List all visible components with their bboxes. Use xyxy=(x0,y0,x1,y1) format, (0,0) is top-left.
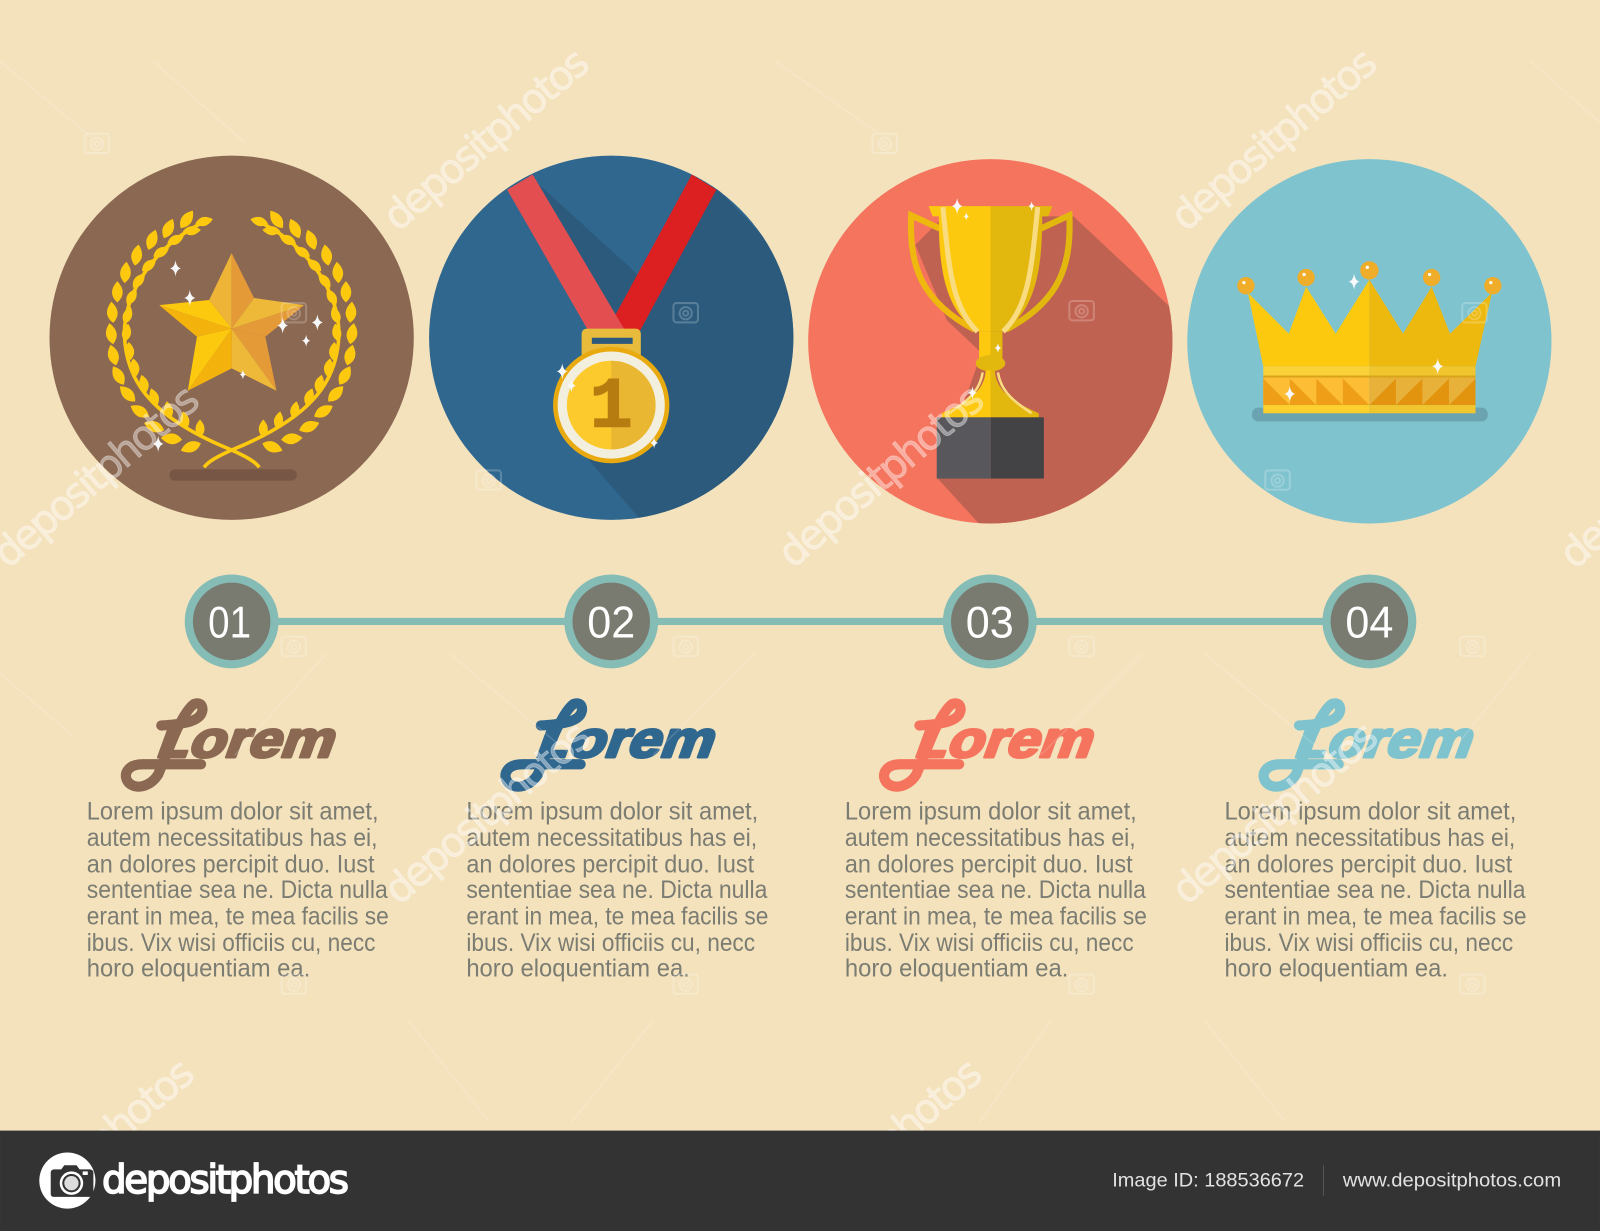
step number 01: 01 xyxy=(208,597,251,648)
text block: horo eloquentiam ea. xyxy=(466,955,690,983)
text block: ibus. Vix wisi officiis cu, necc xyxy=(87,929,376,957)
icon: gold trophy xyxy=(808,159,1189,531)
text block: erant in mea, te mea facilis se xyxy=(1224,902,1527,930)
text block: autem necessitatibus has ei, xyxy=(87,824,378,852)
text block: sententiae sea ne. Dicta nulla xyxy=(1224,876,1526,904)
text block: horo eloquentiam ea. xyxy=(1224,955,1448,983)
panel: step 3 trophy xyxy=(808,159,1189,983)
text block: sententiae sea ne. Dicta nulla xyxy=(845,876,1146,904)
heading: Lorem: L xyxy=(530,712,582,769)
watermark overlay: depositphotos xyxy=(768,375,993,577)
text block xyxy=(1224,797,1527,983)
text block: autem necessitatibus has ei, xyxy=(845,824,1136,852)
text block xyxy=(845,797,1147,983)
heading: Lorem xyxy=(884,703,1105,787)
heading: Lorem: orem xyxy=(183,712,347,769)
heading: Lorem: L xyxy=(151,712,203,769)
watermark overlay: depositphotos xyxy=(1162,712,1387,914)
text block: sententiae sea ne. Dicta nulla xyxy=(87,876,388,904)
heading: Lorem xyxy=(126,703,347,787)
text block: horo eloquentiam ea. xyxy=(845,955,1068,983)
text block: sententiae sea ne. Dicta nulla xyxy=(466,876,767,904)
text block: an dolores percipit duo. Iust xyxy=(466,850,754,878)
heading: Lorem xyxy=(505,703,727,787)
step number 02 xyxy=(568,579,654,664)
step number 04 xyxy=(1327,579,1412,664)
text block: Lorem ipsum dolor sit amet, xyxy=(1224,797,1516,825)
text block: erant in mea, te mea facilis se xyxy=(466,902,768,930)
icon: depositphotos camera logo xyxy=(39,1153,95,1209)
text block: an dolores percipit duo. Iust xyxy=(1224,850,1512,878)
icon: laurel wreath with star xyxy=(50,156,414,520)
text block: an dolores percipit duo. Iust xyxy=(845,850,1133,878)
heading: Lorem: L xyxy=(909,712,961,769)
step number 02: 02 xyxy=(587,597,635,648)
panel: step 2 medal xyxy=(429,156,816,983)
text block: Lorem ipsum dolor sit amet, xyxy=(87,797,379,825)
text block: Lorem ipsum dolor sit amet, xyxy=(845,797,1137,825)
image id: Image ID: 188536672 xyxy=(1112,1170,1304,1192)
text block xyxy=(466,797,768,983)
numeral 1 on medal: 1 xyxy=(590,369,633,449)
text block: horo eloquentiam ea. xyxy=(87,955,310,983)
watermark overlay: depositphotos xyxy=(374,712,599,914)
text block: autem necessitatibus has ei, xyxy=(1224,824,1515,852)
text block: ibus. Vix wisi officiis cu, necc xyxy=(845,929,1134,957)
footer bar xyxy=(0,1131,1600,1231)
text block: erant in mea, te mea facilis se xyxy=(87,902,389,930)
timeline connector xyxy=(232,618,1369,625)
heading: Lorem: orem xyxy=(562,712,727,769)
brand name: depositphotos xyxy=(102,1158,349,1203)
watermark overlay: depositphotos xyxy=(1161,38,1386,240)
heading: Lorem: orem xyxy=(1320,712,1485,769)
step number 04: 04 xyxy=(1345,597,1393,648)
step number 03: 03 xyxy=(966,597,1014,648)
panel: step 1 laurel star xyxy=(50,156,414,983)
step number 01 xyxy=(189,579,274,664)
text block: autem necessitatibus has ei, xyxy=(466,824,757,852)
text block: ibus. Vix wisi officiis cu, necc xyxy=(466,929,755,957)
website url: www.depositphotos.com xyxy=(1342,1170,1561,1192)
heading: Lorem: orem xyxy=(941,712,1105,769)
text block: an dolores percipit duo. Iust xyxy=(87,850,375,878)
heading: Lorem: L xyxy=(1289,712,1341,769)
text block: Lorem ipsum dolor sit amet, xyxy=(466,797,758,825)
heading: Lorem xyxy=(1264,703,1485,787)
icon: gold crown xyxy=(1187,159,1552,523)
text block: ibus. Vix wisi officiis cu, necc xyxy=(1224,929,1513,957)
icon: gold medal with ribbon xyxy=(429,156,816,531)
watermark overlay: depositphotos xyxy=(373,38,598,240)
step number 03 xyxy=(947,579,1033,664)
text block xyxy=(87,797,389,983)
panel: step 4 crown xyxy=(1187,159,1552,983)
text block: erant in mea, te mea facilis se xyxy=(845,902,1147,930)
